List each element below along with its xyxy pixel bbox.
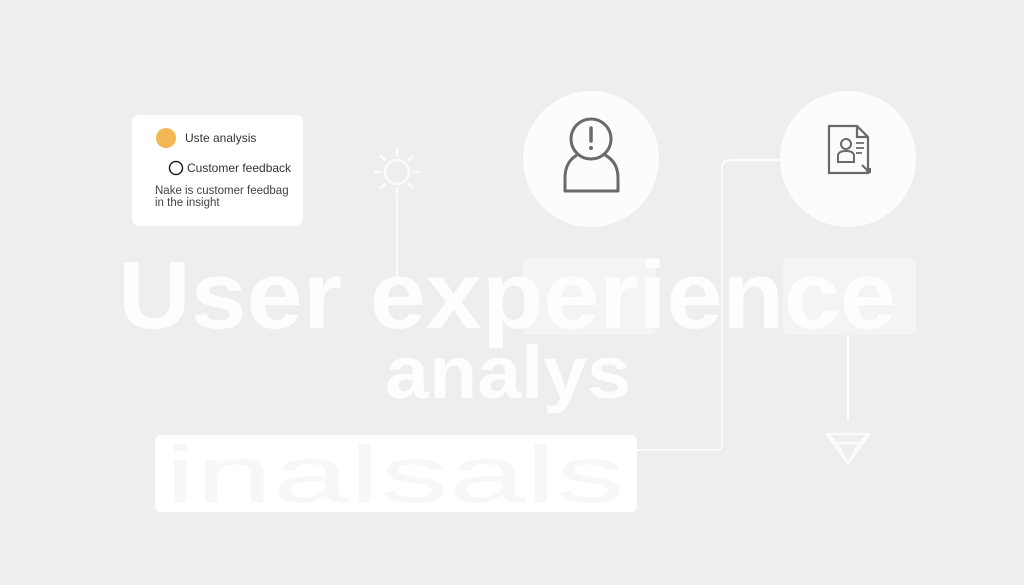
highlight boxes — [523, 258, 916, 335]
text block: white bar: inalsals — [165, 430, 625, 519]
panel: legend card: Nake is customer feedbag — [155, 185, 289, 197]
panel: legend card: Customer feedback — [187, 161, 292, 175]
icon: sun — [375, 150, 419, 194]
icon: diamond — [827, 434, 869, 464]
title — [118, 242, 896, 414]
icon circle: document profile — [780, 91, 916, 227]
icon circle: user alert — [523, 91, 659, 227]
panel: legend card: in the insight — [155, 197, 220, 209]
text block: white bar — [155, 430, 637, 519]
title: analys — [385, 331, 631, 414]
panel: legend card: Uste analysis — [185, 131, 256, 145]
title: User experience — [118, 242, 896, 349]
panel: legend card — [132, 115, 303, 226]
connector lines — [397, 160, 848, 450]
